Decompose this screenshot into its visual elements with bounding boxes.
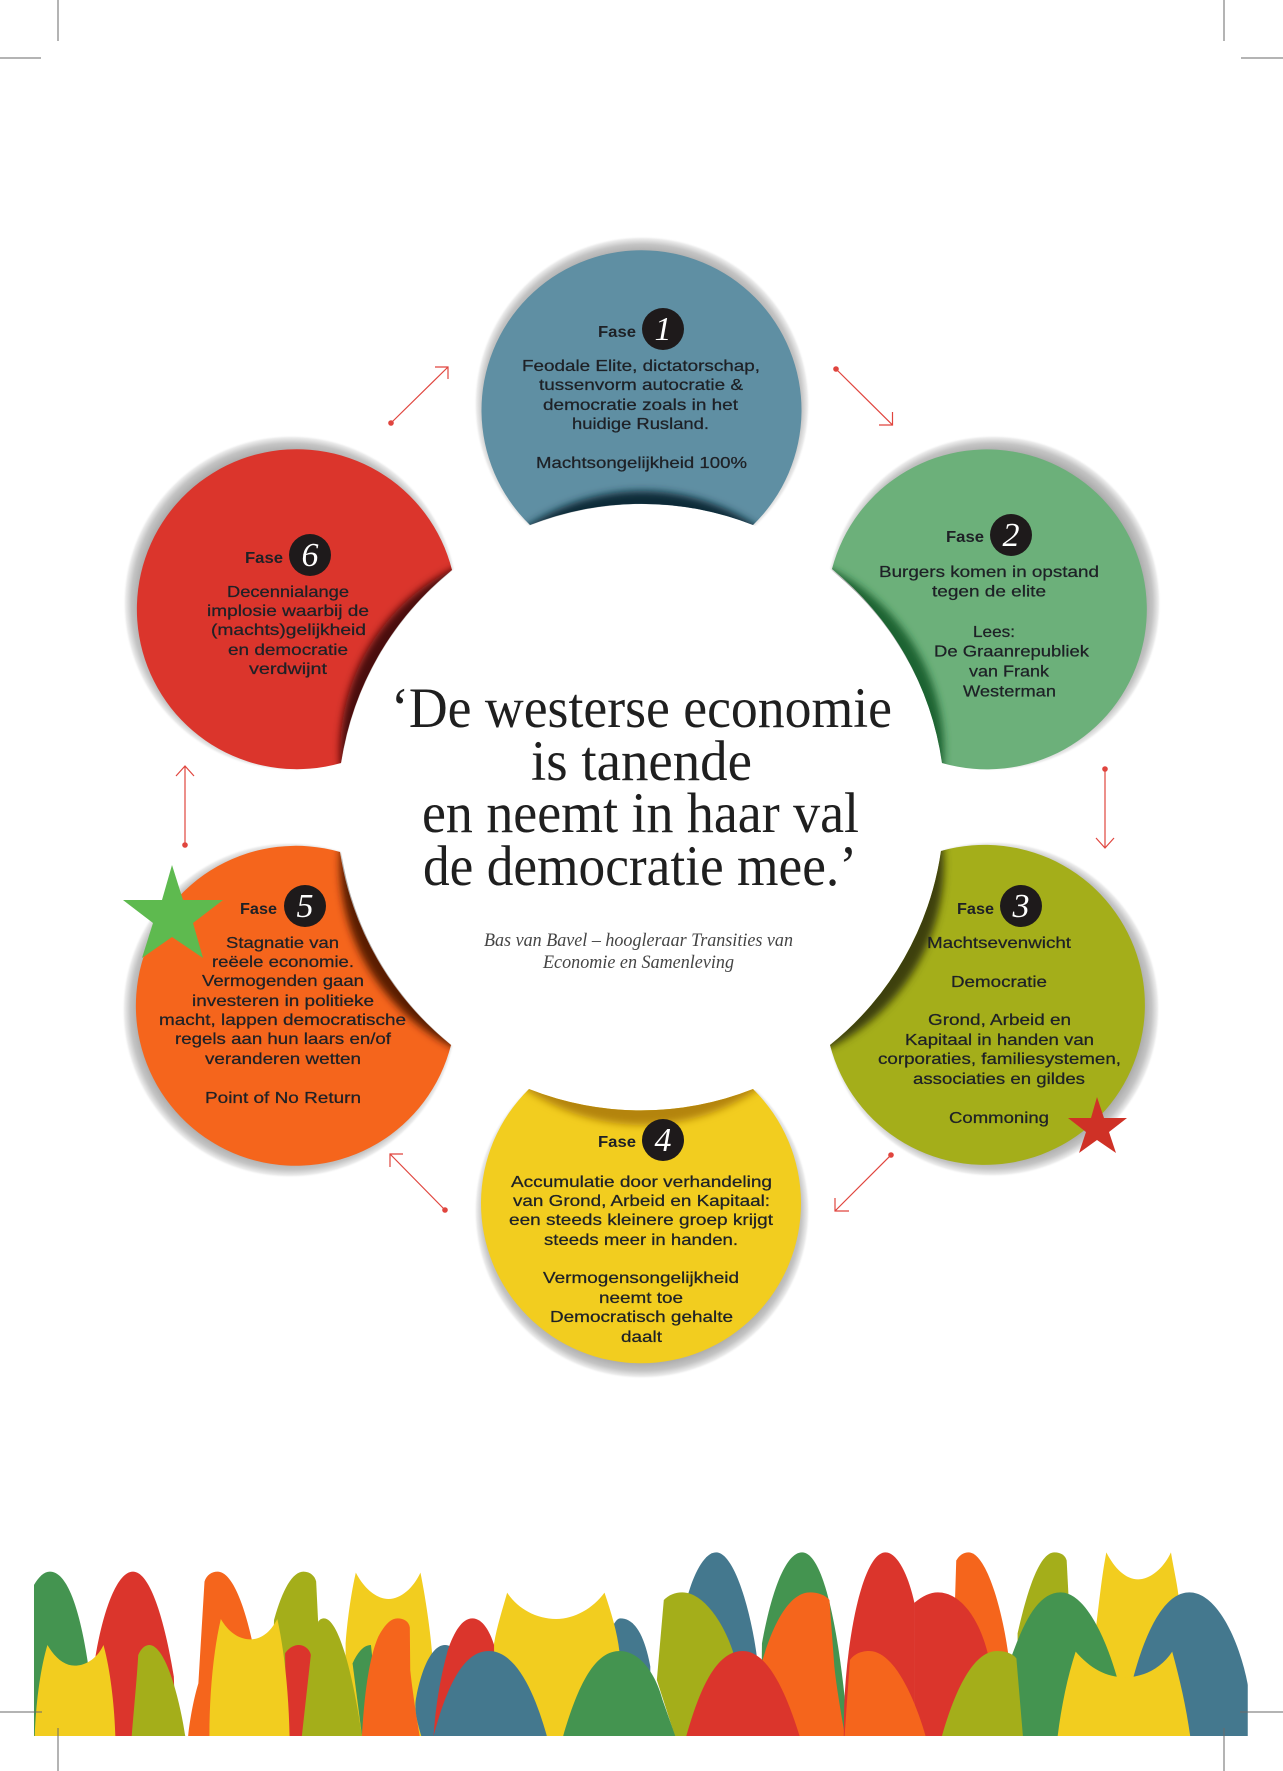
arrow: fase 4 to 5: [390, 1154, 448, 1213]
panel: fase 1: democratie zoals in het: [543, 397, 739, 414]
panel: fase 2: Fase: [946, 529, 984, 546]
arrow: fase 3 to 4: [835, 1152, 894, 1211]
arrow: fase 5 to 6: [176, 766, 194, 848]
panel: fase 2: van Frank: [969, 664, 1050, 680]
panel: fase 3: Machtsevenwicht: [927, 935, 1072, 952]
title quote: ‘De westerse economie: [391, 677, 892, 740]
panel: fase 3: Kapitaal in handen van: [905, 1032, 1094, 1049]
panel: fase 5: Stagnatie van: [226, 935, 339, 952]
title quote: en neemt in haar val: [422, 782, 859, 845]
panel: fase 5: [136, 846, 451, 1166]
panel: fase 3: Democratie: [951, 974, 1047, 991]
panel: fase 6: implosie waarbij de: [207, 603, 369, 620]
central white circle: [338, 504, 946, 1112]
panel: fase 6: en democratie: [228, 642, 348, 659]
panel: fase 5: veranderen wetten: [205, 1051, 361, 1068]
panel: fase 2: Westerman: [963, 684, 1056, 700]
panel: fase 4: Vermogensongelijkheid: [543, 1270, 739, 1287]
panel: fase 3: Grond, Arbeid en: [928, 1012, 1071, 1029]
panel: fase 1: 1: [654, 311, 672, 348]
panel: fase 6: [136, 449, 452, 770]
panel: fase 5: Point of No Return: [205, 1090, 361, 1107]
title quote: is tanende: [531, 730, 752, 793]
panel: fase 4: een steeds kleinere groep krijgt: [509, 1212, 774, 1229]
panel: fase 5: 5: [296, 888, 314, 925]
panel: fase 3: Commoning: [949, 1110, 1049, 1127]
panel: fase 3: associaties en gildes: [913, 1071, 1085, 1088]
title quote: de democratie mee.’: [423, 835, 857, 898]
panel: fase 4: steeds meer in handen.: [544, 1232, 738, 1249]
panel: fase 4: neemt toe: [599, 1290, 683, 1307]
panel: fase 5: reëele economie.: [212, 954, 354, 971]
panel: fase 3: [830, 844, 1145, 1165]
arrow: fase 1 to 2: [833, 366, 892, 425]
panel: fase 3: 3: [1012, 888, 1030, 925]
panel: fase 3: Fase: [957, 901, 994, 918]
panel: fase 4: Accumulatie door verhandeling: [511, 1174, 772, 1191]
panel: fase 4: [481, 1089, 801, 1364]
drop shadows behind the phase circles: [122, 236, 1161, 1379]
panel: fase 6: (machts)gelijkheid: [211, 622, 366, 639]
panel: fase 2: 2: [1002, 517, 1020, 554]
panel: fase 2: Burgers komen in opstand: [879, 564, 1099, 581]
panel: fase 1: tussenvorm autocratie &: [539, 377, 743, 394]
panel: fase 4: Democratisch gehalte: [550, 1309, 733, 1326]
panel: fase 6: 6: [302, 537, 318, 574]
attribution: Bas van Bavel – hoogleraar Transities van: [484, 930, 793, 951]
icon: green star: [123, 865, 223, 958]
panel: fase 4: 4: [654, 1122, 672, 1159]
arrow: fase 6 to 1: [388, 367, 448, 426]
panel: fase 1: Feodale Elite, dictatorschap,: [522, 358, 760, 375]
panel: fase 6: Fase: [245, 550, 283, 567]
panel: fase 6: verdwijnt: [249, 661, 328, 678]
panel: fase 2: De Graanrepubliek: [934, 644, 1090, 660]
attribution: [484, 930, 793, 973]
icon: red star: [1068, 1097, 1127, 1153]
panel: fase 1: Fase: [598, 324, 636, 341]
panel: fase 2: tegen de elite: [932, 584, 1046, 600]
panel: fase 2: [832, 449, 1147, 770]
title quote: [391, 677, 892, 898]
panel: fase 5: Vermogenden gaan: [202, 973, 364, 990]
panel: fase 3: corporaties, familiesystemen,: [878, 1051, 1121, 1068]
panel: fase 1: [482, 250, 802, 525]
panel: fase 4: van Grond, Arbeid en Kapitaal:: [513, 1193, 770, 1210]
arrow: fase 2 to 3: [1096, 766, 1114, 848]
panel: fase 5: macht, lappen democratische: [159, 1012, 406, 1029]
panel: fase 1: huidige Rusland.: [572, 416, 709, 433]
panel: fase 6: Decennialange: [227, 584, 349, 601]
attribution: Economie en Samenleving: [542, 952, 734, 973]
panel: fase 1: Machtsongelijkheid 100%: [536, 455, 747, 472]
decorative colour band: [34, 1552, 1248, 1736]
panel: fase 2: Lees:: [973, 624, 1015, 641]
panel: fase 5: investeren in politieke: [192, 993, 374, 1010]
panel: fase 4: daalt: [621, 1329, 663, 1346]
panel: fase 5: regels aan hun laars en/of: [175, 1031, 392, 1048]
panel: fase 4: Fase: [598, 1134, 636, 1151]
panel: fase 5: Fase: [240, 901, 277, 918]
